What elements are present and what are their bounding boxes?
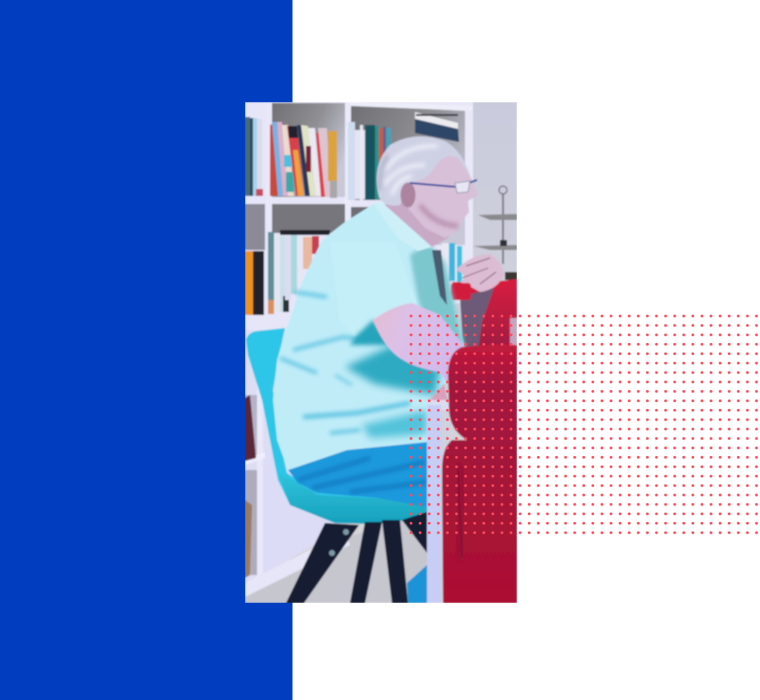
jaw shading bbox=[420, 205, 458, 226]
books, top right shelf bbox=[415, 112, 459, 142]
forearm bbox=[373, 303, 465, 384]
red chair, back upper bbox=[452, 279, 517, 352]
placket bbox=[432, 250, 447, 305]
under-sleeve shadow bbox=[350, 320, 392, 345]
man's far arm and hand bbox=[451, 254, 504, 350]
books, third compartment bbox=[348, 122, 391, 200]
cake stand bbox=[473, 186, 517, 280]
red dot grid bbox=[406, 311, 760, 537]
floor and skirting bbox=[245, 520, 427, 603]
books, first compartment bbox=[245, 117, 263, 196]
wall bbox=[289, 102, 517, 561]
books behind the man bbox=[442, 243, 462, 283]
lower shelf unit bbox=[245, 330, 290, 603]
sleeve bbox=[352, 302, 416, 337]
books, second compartment bbox=[270, 122, 337, 198]
face bbox=[408, 156, 478, 238]
book fragments low on shelf bbox=[245, 395, 256, 578]
hair bbox=[377, 136, 471, 206]
blue chair back bbox=[246, 328, 428, 524]
shirt bbox=[273, 202, 465, 470]
red chair, front back bbox=[447, 344, 517, 442]
blue background panel bbox=[0, 0, 292, 700]
glasses bbox=[410, 180, 477, 193]
red chair, lower bbox=[442, 440, 517, 603]
chair legs bbox=[286, 512, 427, 603]
shoe bbox=[407, 565, 427, 603]
hand on table bbox=[430, 384, 448, 400]
table post bbox=[427, 400, 451, 603]
shirt front bbox=[408, 246, 468, 347]
photo: man at a table in front of a bookshelf bbox=[245, 102, 517, 603]
trousers bbox=[288, 442, 427, 507]
collar bbox=[373, 202, 432, 251]
ear bbox=[400, 182, 416, 208]
neck bbox=[384, 202, 448, 248]
books, lower left bbox=[245, 230, 330, 315]
bookshelf bbox=[245, 102, 473, 603]
